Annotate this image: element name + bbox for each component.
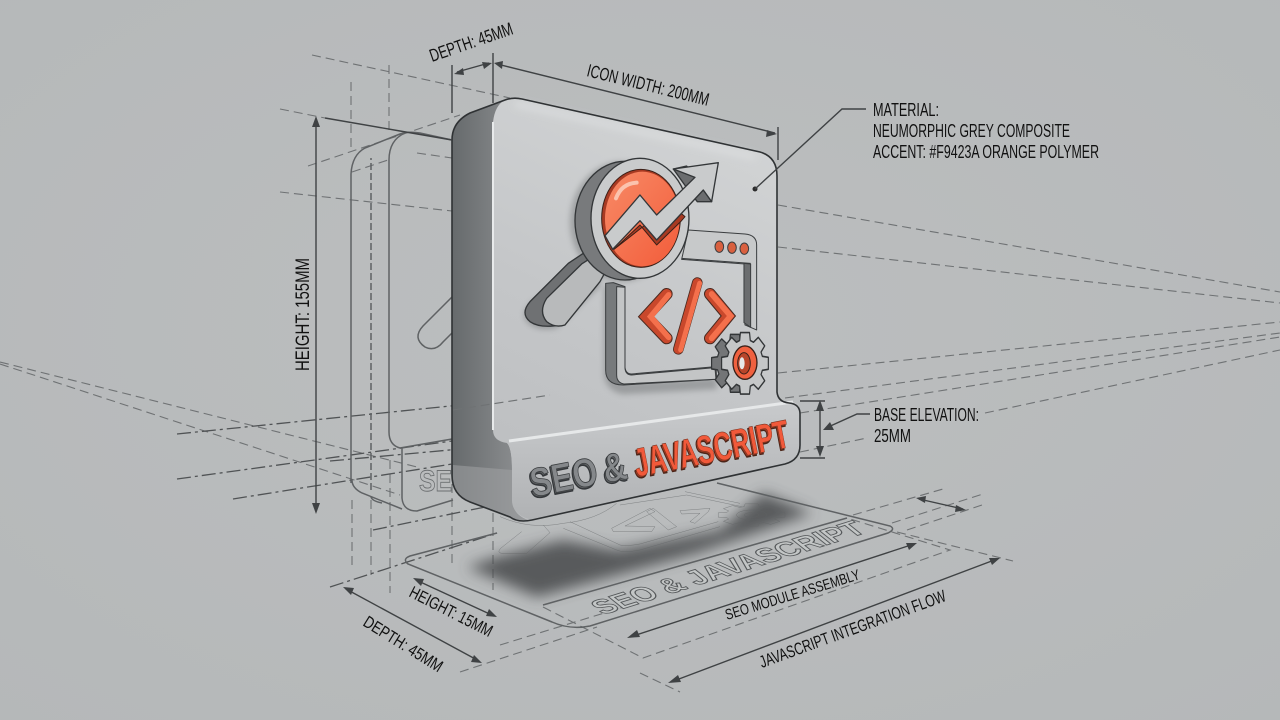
ground lettering: SEO & JAVASCRIPT bbox=[584, 517, 873, 619]
base lettering: SEO & JAVASCRIPT: SEO bbox=[525, 451, 600, 508]
dimension: icon width bbox=[494, 60, 778, 160]
callout: base elevation: BASE ELEVATION: bbox=[874, 404, 979, 425]
dimension: JavaScript integration flow: JAVASCRIPT INTEGRATION FLOW bbox=[757, 587, 948, 672]
icon: gear bbox=[712, 334, 758, 392]
base lettering: SEO & JAVASCRIPT: & bbox=[598, 446, 630, 493]
SEO and code icon bbox=[524, 158, 768, 394]
icon: browser window frame bbox=[606, 230, 757, 385]
dimension: small right arrow bbox=[916, 496, 966, 512]
dimension: base height 15mm bbox=[406, 578, 497, 641]
callout: material: ACCENT: #F9423A ORANGE POLYMER bbox=[873, 141, 1099, 162]
dimension: base height 15mm: HEIGHT: 15MM bbox=[406, 583, 496, 641]
ground footprint bbox=[405, 483, 893, 627]
callout: base elevation bbox=[800, 400, 979, 458]
base lettering: SEO & JAVASCRIPT: JAVASCRIPT bbox=[630, 412, 793, 486]
callout: base elevation: 25MM bbox=[874, 425, 911, 446]
ghost base lettering: SE bbox=[419, 465, 452, 498]
dimension: height: HEIGHT: 155MM bbox=[292, 258, 314, 371]
callout: material: NEUMORPHIC GREY COMPOSITE bbox=[873, 120, 1070, 141]
icon: trend arrow bbox=[614, 207, 685, 249]
ground icon tracing bbox=[499, 492, 785, 553]
icon: magnifier lens bbox=[575, 161, 675, 280]
icon: code brackets bbox=[646, 283, 731, 350]
dimension: icon depth top bbox=[427, 19, 516, 113]
base lettering: SEO & JAVASCRIPT: JAVASCRIPT bbox=[629, 414, 792, 487]
dimension: icon width: ICON WIDTH: 200MM bbox=[585, 60, 711, 110]
window dots bbox=[715, 241, 724, 252]
dimension: SEO module assembly: SEO MODULE ASSEMBLY bbox=[723, 567, 862, 624]
side wall bbox=[452, 100, 528, 521]
dimension: icon depth top: DEPTH: 45MM bbox=[427, 19, 516, 66]
dimension: SEO module assembly bbox=[627, 543, 917, 638]
ghost back outline of icon bbox=[351, 132, 453, 511]
floor shadow bbox=[467, 493, 812, 597]
dimension: base depth 45mm bbox=[343, 587, 482, 676]
dimension: height bbox=[292, 116, 452, 514]
base lettering: SEO & JAVASCRIPT: & bbox=[599, 444, 631, 492]
base lettering: SEO & JAVASCRIPT: SEO bbox=[526, 450, 601, 506]
icon: magnifier handle bbox=[525, 252, 600, 326]
dimension: JavaScript integration flow bbox=[668, 558, 1000, 683]
base lettering: SEO & JAVASCRIPT bbox=[525, 412, 793, 508]
callout: material: MATERIAL: bbox=[873, 99, 939, 120]
icon soft shadow bbox=[524, 162, 717, 388]
main 3D icon body bbox=[452, 98, 800, 521]
dimension: base depth 45mm: DEPTH: 45MM bbox=[360, 612, 446, 676]
base front bbox=[507, 402, 800, 520]
callout: material bbox=[752, 99, 1099, 192]
